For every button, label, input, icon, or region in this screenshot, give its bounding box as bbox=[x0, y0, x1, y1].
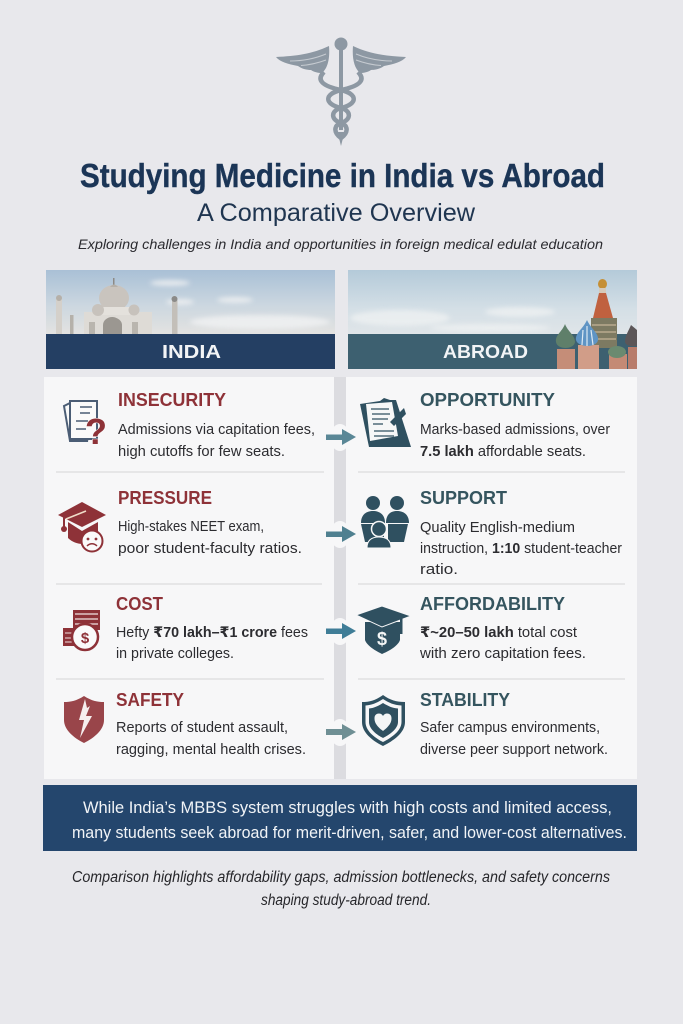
row: Cost: Hefty ₹70 lakh–₹1 crore fees bbox=[116, 625, 308, 641]
arrow: safety to stability bbox=[326, 719, 356, 746]
row: Support: SUPPORT bbox=[420, 488, 507, 508]
row: Support: instruction, 1:10 student-teacher bbox=[420, 541, 622, 557]
row: Cost: COST bbox=[116, 594, 163, 614]
summary banner bbox=[43, 785, 637, 851]
row: Opportunity: OPPORTUNITY bbox=[420, 390, 555, 410]
title: Studying Medicine in India vs Abroad bbox=[80, 157, 605, 194]
icon: group of people bbox=[361, 496, 409, 548]
row: Safety bbox=[64, 690, 306, 758]
row: Safety: SAFETY bbox=[116, 690, 184, 710]
panel: Abroad header bbox=[348, 270, 637, 369]
subtitle: A Comparative Overview bbox=[197, 199, 476, 227]
tagline: Exploring challenges in India and opportunities in foreign medical edulat education bbox=[78, 237, 603, 252]
icon: shield with heart bbox=[362, 695, 405, 746]
row: Stability bbox=[362, 690, 608, 758]
icon: money stack and coin: $ bbox=[81, 630, 90, 647]
icon: money stack and coin bbox=[63, 610, 100, 650]
row: Affordability: ₹~20–50 lakh total cost bbox=[420, 625, 577, 641]
icon: graduation cap on shield with dollar bbox=[356, 606, 411, 654]
icon: caduceus bbox=[276, 38, 406, 146]
row: Insecurity bbox=[64, 390, 315, 460]
row: Stability: Safer campus environments, bbox=[420, 720, 600, 736]
row: Affordability: with zero capitation fees. bbox=[419, 646, 586, 662]
arrow: cost to affordability bbox=[326, 618, 356, 645]
row: Opportunity bbox=[360, 390, 610, 460]
icon: graduation cap on shield with dollar: $ bbox=[377, 629, 387, 649]
row: Opportunity: 7.5 lakh affordable seats. bbox=[420, 444, 586, 460]
icon: Taj Mahal bbox=[56, 278, 178, 334]
row: Affordability: AFFORDABILITY bbox=[420, 594, 565, 614]
row: Support: ratio. bbox=[420, 562, 458, 578]
icon: papers with question mark bbox=[64, 401, 107, 452]
row: Pressure: PRESSURE bbox=[118, 488, 212, 508]
row: Safety: ragging, mental health crises. bbox=[116, 742, 306, 758]
icon: clipboard with pen bbox=[360, 398, 411, 447]
row: Pressure bbox=[58, 488, 302, 557]
icon: shield with lightning bbox=[64, 696, 104, 743]
panel: Abroad list bbox=[346, 377, 637, 779]
row: Safety: Reports of student assault, bbox=[116, 720, 288, 736]
icon: Saint Basil's Cathedral bbox=[556, 279, 637, 369]
row: Insecurity: Admissions via capitation fees, bbox=[118, 422, 315, 438]
label: Abroad: ABROAD bbox=[443, 342, 528, 362]
row: Support: Quality English-medium bbox=[420, 520, 575, 536]
center gutter bbox=[334, 377, 346, 779]
footer note bbox=[72, 869, 610, 909]
row: Cost: in private colleges. bbox=[116, 646, 234, 662]
label: India: INDIA bbox=[162, 342, 221, 362]
row: Affordability bbox=[356, 594, 586, 662]
row: Opportunity: Marks-based admissions, over bbox=[420, 422, 610, 438]
summary banner: many students seek abroad for merit-driven, safer, and lower-cost alternatives. bbox=[72, 823, 627, 842]
row: Insecurity: INSECURITY bbox=[118, 390, 226, 410]
row: Stability: STABILITY bbox=[420, 690, 510, 710]
row: Support bbox=[361, 488, 622, 578]
panel: India header bbox=[46, 270, 335, 369]
row: Cost bbox=[63, 594, 308, 662]
row: Insecurity: high cutoffs for few seats. bbox=[118, 444, 285, 460]
icon: graduation cap with sad face bbox=[58, 502, 106, 552]
footer note: shaping study-abroad trend. bbox=[261, 892, 431, 909]
footer note: Comparison highlights affordability gaps, admission bottlenecks, and safety concerns bbox=[72, 869, 610, 886]
arrow: pressure to support bbox=[326, 521, 356, 548]
row: Pressure: High-stakes NEET exam, bbox=[118, 519, 264, 535]
row: Pressure: poor student-faculty ratios. bbox=[118, 541, 302, 557]
arrow: insecurity to opportunity bbox=[326, 424, 356, 451]
icon: papers with question mark: ? bbox=[85, 411, 107, 452]
summary banner: While India’s MBBS system struggles with high costs and limited access, bbox=[83, 798, 612, 817]
panel: India list bbox=[44, 377, 334, 779]
row: Stability: diverse peer support network. bbox=[420, 742, 608, 758]
